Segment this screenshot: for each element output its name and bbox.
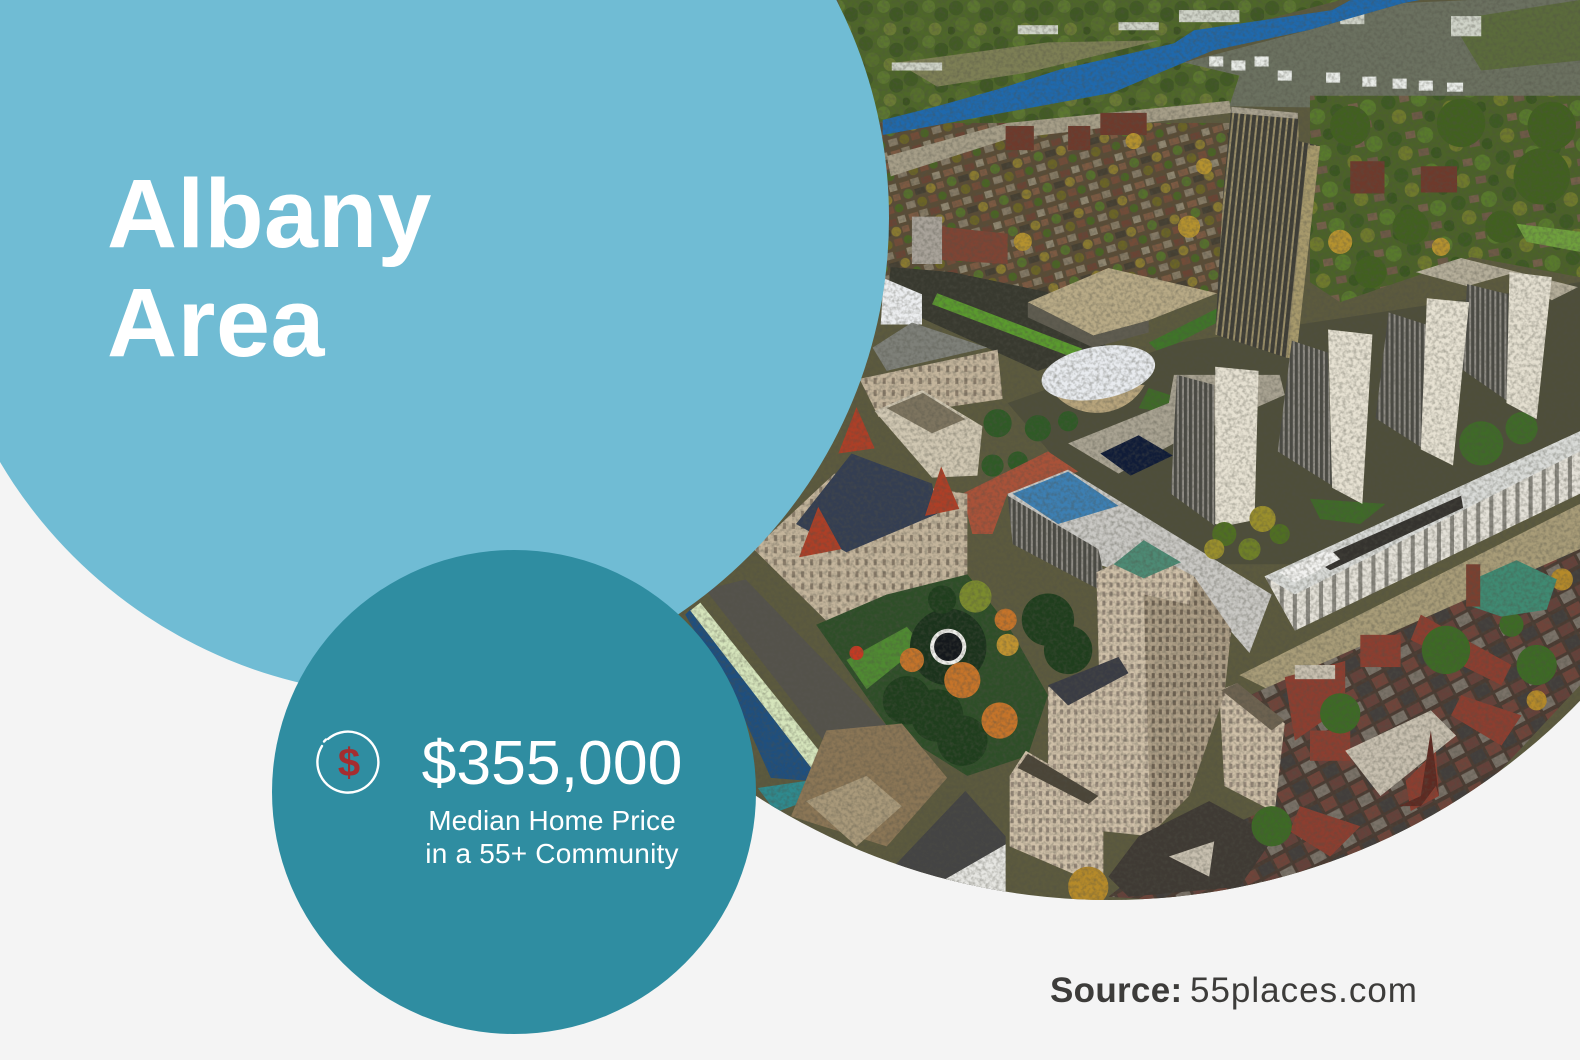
brick apartments [1006, 113, 1457, 193]
government office block [860, 350, 1003, 417]
Alfred E. Smith Building [1010, 540, 1285, 887]
green terraces [1139, 388, 1538, 524]
Empire State Plaza towers [1171, 258, 1578, 526]
title: Albany [107, 159, 432, 268]
neighbourhood left of tower [877, 123, 1229, 294]
large light blue circle [0, 0, 889, 696]
neighbourhood right of tower [1310, 96, 1580, 302]
island and near bank [950, 62, 1240, 123]
red brick plaza [962, 451, 1078, 534]
Egg performing arts center [1042, 345, 1156, 413]
aerial photo of Albany [678, 0, 1580, 900]
reflecting pool [1100, 435, 1173, 476]
Justice building [1008, 470, 1272, 653]
avenue [1239, 504, 1580, 695]
highway [887, 101, 1231, 176]
grass median [932, 293, 1082, 359]
church spire [1399, 731, 1439, 806]
long south mall building [1265, 431, 1580, 631]
source line: 55places.com [1190, 971, 1418, 1010]
far bank and forest [836, 0, 1360, 123]
street [705, 579, 887, 751]
autumn canopy [1014, 133, 1450, 256]
yellow plaza trees [1204, 506, 1290, 560]
pale building edge [690, 602, 818, 768]
autumn trees [849, 580, 1019, 739]
pale fields on far bank [897, 40, 1159, 87]
river [883, 0, 1436, 135]
teal roof [758, 781, 806, 810]
green-roofed church [1466, 560, 1557, 617]
source line: Source: [1050, 971, 1182, 1010]
title: Area [107, 268, 326, 377]
flat brown roof [791, 723, 947, 846]
brick rowhouse highlights [1285, 615, 1522, 857]
State Capitol [754, 407, 967, 633]
capitol park lawn [816, 574, 1048, 776]
city texture [440, 0, 1580, 900]
Corning Tower [1215, 107, 1320, 361]
dark teal stat circle [272, 550, 756, 1034]
parking and road band [887, 267, 1108, 371]
white building [881, 278, 922, 324]
far bank buildings [892, 10, 1481, 71]
waterfront industry [1184, 0, 1580, 111]
tree canopy, right [1330, 99, 1576, 288]
icon: dollar coin: $ [338, 741, 360, 785]
dark low-rise [892, 791, 1006, 897]
median home price value: $355,000 [422, 728, 682, 798]
cultural building [875, 390, 982, 478]
oil tanks [1209, 56, 1463, 92]
rowhouses, south east [1108, 549, 1580, 902]
icon: dollar coin [317, 732, 378, 793]
park trees [883, 585, 1092, 766]
rooftops near tower base [1108, 801, 1275, 897]
plaza trees [981, 409, 1078, 477]
curved green ramp [1149, 308, 1217, 353]
convention center [1028, 268, 1217, 336]
plaza deck [1068, 375, 1285, 474]
plaza ground [1008, 282, 1580, 564]
park lawn [1517, 224, 1580, 252]
grey roofs [873, 322, 987, 371]
fountain [910, 609, 986, 685]
median home price caption: in a 55+ Community [425, 838, 679, 869]
red-brick tower [912, 217, 942, 264]
dark glazed strip [685, 609, 822, 782]
median home price caption: Median Home Price [428, 805, 676, 836]
city base [678, 0, 1580, 900]
